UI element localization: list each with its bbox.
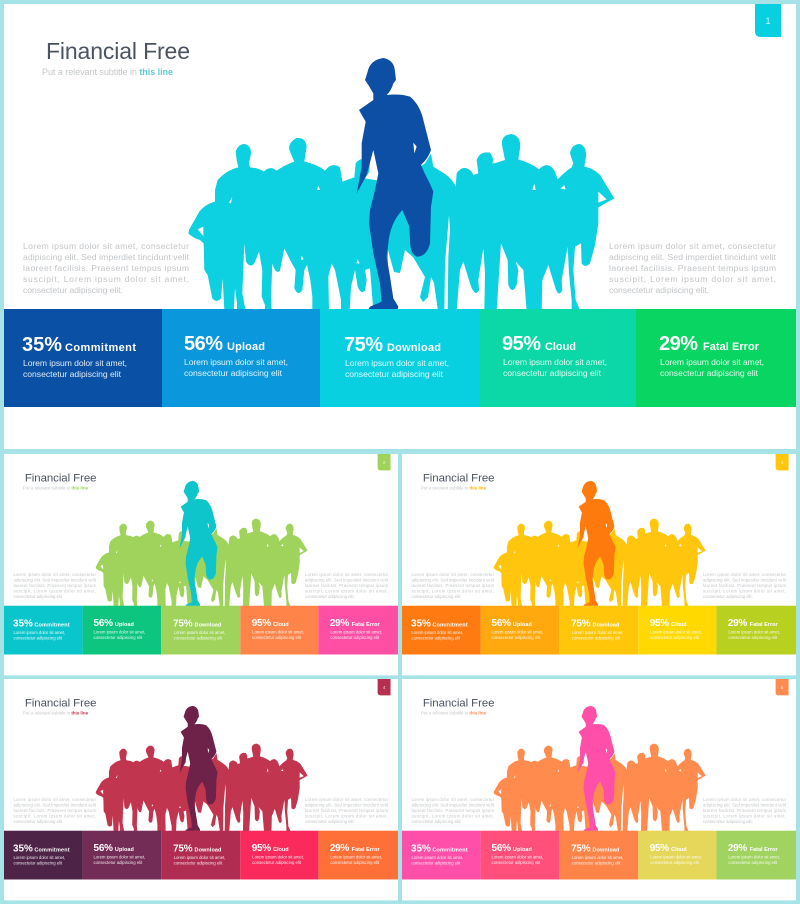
text block right: suscipit, Lorem ipsum dolor sit amet, [305, 813, 388, 818]
stat card: upload: consectetur adipiscing elit [94, 860, 143, 865]
stat card: download [161, 831, 240, 879]
stat card: cloud: 95% [650, 843, 669, 854]
stat card: download: Lorem ipsum dolor sit amet, [174, 630, 225, 635]
stat card: download: Lorem ipsum dolor sit amet, [572, 855, 623, 860]
stat card: fatal error [318, 606, 398, 654]
stat card: commitment [402, 831, 481, 879]
stat card: commitment [4, 606, 83, 654]
stat card: download: consectetur adipiscing elit [572, 861, 621, 866]
stat card: cloud: consectetur adipiscing elit [650, 860, 700, 865]
text block left: consectetur adipiscing elit. [13, 594, 63, 599]
text block left: Lorem ipsum dolor sit amet, consectetur [13, 572, 97, 577]
stat card: fatal error [716, 831, 796, 879]
text block left: suscipit, Lorem ipsum dolor sit amet, [411, 588, 494, 593]
stat card: fatal error: Lorem ipsum dolor sit amet, [660, 357, 764, 367]
text block left: laoreet facilisis. Praesent tempus ipsum [13, 583, 96, 588]
stat card: download [559, 606, 638, 654]
stat card: fatal error: consectetur adipiscing elit [728, 860, 778, 865]
slide background [402, 679, 796, 900]
stat card: fatal error [716, 606, 796, 654]
slide background [4, 4, 796, 449]
subtitle: Put a relevant subtitle in this line [42, 67, 173, 77]
silhouette: lead runner [179, 481, 218, 606]
stat card: cloud: consectetur adipiscing elit [252, 635, 302, 640]
stat card: fatal error: consectetur adipiscing elit [660, 368, 759, 378]
text block left: laoreet facilisis. Praesent tempus ipsum [13, 808, 96, 813]
text block right: Lorem ipsum dolor sit amet, consectetur [703, 572, 787, 577]
stat card: commitment: 35% [22, 334, 62, 356]
page tag: 4 [383, 685, 386, 690]
stat card: upload: Lorem ipsum dolor sit amet, [94, 855, 145, 860]
stat card: commitment: Lorem ipsum dolor sit amet, [13, 630, 65, 635]
stat card: upload [162, 309, 320, 407]
text block left: laoreet facilisis. Praesent tempus ipsum [411, 583, 494, 588]
stat card: upload: 56% [94, 618, 113, 629]
stat card: cloud: Lorem ipsum dolor sit amet, [650, 855, 702, 860]
stat card: upload: consectetur adipiscing elit [492, 860, 541, 865]
text block right: Lorem ipsum dolor sit amet, consectetur [305, 797, 389, 802]
text block left: adipiscing elit. Sed imperdiet tincidunt velit [13, 802, 97, 807]
stat card: commitment: Commitment [34, 623, 70, 629]
stat card: cloud: consectetur adipiscing elit [503, 368, 602, 378]
stat card: fatal error [636, 309, 796, 407]
stat card: download: Lorem ipsum dolor sit amet, [174, 855, 225, 860]
page tag [378, 679, 391, 695]
stat card: cloud [240, 831, 318, 879]
stat card: fatal error: Fatal Error [352, 622, 380, 628]
stat card: download: consectetur adipiscing elit [345, 369, 444, 379]
stat card: download: Lorem ipsum dolor sit amet, [345, 358, 449, 368]
stat card: commitment: Commitment [432, 623, 468, 629]
stat card: commitment: Commitment [65, 342, 136, 354]
text block right: laoreet facilisis. Praesent tempus ipsum [703, 808, 786, 813]
page tag: 1 [765, 16, 771, 26]
panel: small slide crimson [4, 679, 398, 900]
text block right: suscipit, Lorem ipsum dolor sit amet, [305, 588, 388, 593]
stat card: download: Download [593, 623, 619, 629]
stat card: upload: Lorem ipsum dolor sit amet, [184, 357, 288, 367]
stat card: upload: Upload [115, 847, 134, 853]
silhouette: lead runner [577, 481, 616, 606]
text block right: consectetur adipiscing elit. [703, 594, 753, 599]
title: Financial Free [25, 472, 97, 484]
text block left [411, 797, 495, 824]
stat card: fatal error: consectetur adipiscing elit [330, 635, 380, 640]
text block right: Lorem ipsum dolor sit amet, consectetur [703, 797, 787, 802]
text block right: Lorem ipsum dolor sit amet, consectetur [609, 241, 776, 251]
stat card: cloud: Cloud [671, 847, 687, 853]
stat card: cloud: Cloud [545, 341, 576, 353]
text block left: consectetur adipiscing elit. [13, 819, 63, 824]
page tag: 2 [383, 460, 386, 465]
stat card: cloud: Cloud [273, 847, 289, 853]
stat card: cloud [638, 831, 716, 879]
silhouette: running crowd [494, 519, 706, 607]
text block left [411, 572, 495, 599]
stat card: download: consectetur adipiscing elit [572, 636, 621, 641]
stat card: upload [481, 831, 559, 879]
stat card: commitment [4, 831, 83, 879]
slide background [4, 679, 398, 900]
stat card: download: 75% [571, 619, 591, 630]
stat card: commitment: 35% [411, 844, 431, 855]
stat card: cloud: 95% [502, 333, 541, 355]
stat card: cloud [240, 606, 318, 654]
stat card: cloud: consectetur adipiscing elit [252, 860, 302, 865]
stat card: cloud: consectetur adipiscing elit [650, 635, 700, 640]
panel: main slide blue [4, 4, 796, 449]
stat card: download: Download [195, 848, 221, 854]
panel: small slide green [4, 454, 398, 675]
stat card: upload: 56% [492, 843, 511, 854]
stat card: fatal error: Lorem ipsum dolor sit amet, [728, 855, 780, 860]
text block right [609, 241, 777, 295]
slide background [402, 454, 796, 675]
panel: small slide orange pink [402, 679, 796, 900]
stat card: commitment: Commitment [432, 848, 468, 854]
text block right: suscipit, Lorem ipsum dolor sit amet, [703, 588, 786, 593]
stat card: commitment: consectetur adipiscing elit [23, 369, 122, 379]
silhouette: lead runner [179, 706, 218, 831]
subtitle: Put a relevant subtitle in this line [23, 710, 89, 715]
stat card: cloud [479, 309, 636, 407]
stat card: cloud: 95% [252, 618, 271, 629]
stat card: fatal error: Lorem ipsum dolor sit amet, [728, 630, 780, 635]
text block right: consectetur adipiscing elit. [305, 594, 355, 599]
text block left: adipiscing elit. Sed imperdiet tincidunt velit [411, 802, 495, 807]
stat card: download: consectetur adipiscing elit [174, 636, 223, 641]
stat card: upload: Upload [513, 847, 532, 853]
stat card: fatal error: 29% [728, 843, 747, 854]
stat card: upload: 56% [94, 843, 113, 854]
text block left [13, 797, 97, 824]
stat card: commitment: Lorem ipsum dolor sit amet, [13, 855, 65, 860]
stat card: upload: Upload [227, 341, 265, 353]
text block right [305, 797, 389, 824]
stat card: commitment [402, 606, 481, 654]
stat card: fatal error: consectetur adipiscing elit [330, 860, 380, 865]
text block left [13, 572, 97, 599]
text block right: consectetur adipiscing elit. [609, 285, 709, 295]
text block right: Lorem ipsum dolor sit amet, consectetur [305, 572, 389, 577]
text block right: suscipit, Lorem ipsum dolor sit amet, [703, 813, 786, 818]
text block left: consectetur adipiscing elit. [23, 285, 123, 295]
text block left: Lorem ipsum dolor sit amet, consectetur [13, 797, 97, 802]
stat card: cloud: 95% [650, 618, 669, 629]
stat card: fatal error: Fatal Error [352, 847, 380, 853]
stat card: commitment: Commitment [34, 848, 70, 854]
stat card: upload [83, 606, 161, 654]
text block right: adipiscing elit. Sed imperdiet tincidunt velit [305, 577, 389, 582]
stat card: commitment: Lorem ipsum dolor sit amet, [23, 358, 127, 368]
stat card: commitment [4, 309, 162, 407]
text block left: laoreet facilisis. Praesent tempus ipsum [411, 808, 494, 813]
stat card: upload: consectetur adipiscing elit [94, 635, 143, 640]
stat card: upload: 56% [184, 333, 223, 355]
stat card: fatal error: consectetur adipiscing elit [728, 635, 778, 640]
text block left: Lorem ipsum dolor sit amet, consectetur [23, 241, 189, 251]
stat card: cloud: Cloud [671, 622, 687, 628]
text block right: adipiscing elit. Sed imperdiet tincidunt velit [703, 802, 787, 807]
slide background [4, 454, 398, 675]
stat card: fatal error: Lorem ipsum dolor sit amet, [330, 630, 382, 635]
stat card: commitment: 35% [411, 619, 431, 630]
stat card: download [320, 309, 479, 407]
stat card: download: Lorem ipsum dolor sit amet, [572, 630, 623, 635]
page tag: 5 [781, 685, 784, 690]
silhouette: lead runner [357, 58, 433, 309]
text block left: suscipit, Lorem ipsum dolor sit amet, [411, 813, 494, 818]
text block right: adipiscing elit. Sed imperdiet tincidunt velit [609, 252, 777, 262]
text block left: suscipit, Lorem ipsum dolor sit amet, [13, 588, 96, 593]
stat card: fatal error: 29% [659, 333, 698, 355]
silhouette: lead runner [577, 706, 616, 831]
stat card: commitment: Lorem ipsum dolor sit amet, [411, 855, 463, 860]
stat card: cloud: Lorem ipsum dolor sit amet, [252, 630, 304, 635]
text block left: adipiscing elit. Sed imperdiet tincidunt velit [13, 577, 97, 582]
stat card: cloud [638, 606, 716, 654]
stat card: upload [83, 831, 161, 879]
stat card: commitment: 35% [13, 619, 33, 630]
stat card: download: consectetur adipiscing elit [174, 861, 223, 866]
stat card: commitment: 35% [13, 844, 33, 855]
page tag [776, 454, 789, 470]
stat card: cloud: Lorem ipsum dolor sit amet, [252, 855, 304, 860]
stat card: download: 75% [173, 844, 193, 855]
title: Financial Free [423, 472, 495, 484]
text block right: laoreet facilisis. Praesent tempus ipsum [703, 583, 786, 588]
silhouette: running crowd [96, 519, 308, 607]
silhouette: running crowd [188, 134, 614, 311]
stat card: upload: Lorem ipsum dolor sit amet, [492, 855, 543, 860]
text block right: consectetur adipiscing elit. [305, 819, 355, 824]
text block right: suscipit, Lorem ipsum dolor sit amet, [609, 274, 776, 284]
text block left: consectetur adipiscing elit. [411, 819, 461, 824]
stat card: fatal error: Fatal Error [703, 341, 760, 353]
stat card: download: 75% [173, 619, 193, 630]
stat card: cloud: Cloud [273, 622, 289, 628]
stat card: download: Download [593, 848, 619, 854]
stat card: fatal error [318, 831, 398, 879]
stat card: fatal error: Fatal Error [750, 622, 778, 628]
stat card: download [161, 606, 240, 654]
text block right: adipiscing elit. Sed imperdiet tincidunt velit [305, 802, 389, 807]
stat card: cloud: 95% [252, 843, 271, 854]
stat card: commitment: consectetur adipiscing elit [13, 636, 63, 641]
stat card: upload: 56% [492, 618, 511, 629]
text block right: consectetur adipiscing elit. [703, 819, 753, 824]
text block right: laoreet facilisis. Praesent tempus ipsum [305, 808, 388, 813]
page tag [378, 454, 391, 470]
text block right [305, 572, 389, 599]
stat card: upload: Upload [513, 622, 532, 628]
stat card: upload: Lorem ipsum dolor sit amet, [94, 630, 145, 635]
text block left [23, 241, 190, 295]
stat card: commitment: consectetur adipiscing elit [411, 861, 461, 866]
page tag [755, 4, 781, 37]
subtitle: Put a relevant subtitle in this line [23, 485, 89, 490]
stat card: upload: Lorem ipsum dolor sit amet, [492, 630, 543, 635]
stat card: download: Download [195, 623, 221, 629]
page tag: 3 [781, 460, 784, 465]
stat card: commitment: consectetur adipiscing elit [411, 636, 461, 641]
stat card: upload: consectetur adipiscing elit [492, 635, 541, 640]
subtitle: Put a relevant subtitle in this line [421, 485, 487, 490]
stat card: upload: Upload [115, 622, 134, 628]
text block right: laoreet facilisis. Praesent tempus ipsum [305, 583, 388, 588]
title: Financial Free [423, 697, 495, 709]
stat card: cloud: Lorem ipsum dolor sit amet, [650, 630, 702, 635]
text block left: consectetur adipiscing elit. [411, 594, 461, 599]
silhouette: running crowd [96, 744, 308, 832]
text block left: adipiscing elit. Sed imperdiet tincidunt velit [23, 252, 190, 262]
text block right [703, 797, 787, 824]
stat card: fatal error: 29% [728, 618, 747, 629]
text block right [703, 572, 787, 599]
page tag [776, 679, 789, 695]
stat card: commitment: consectetur adipiscing elit [13, 861, 63, 866]
stat card: cloud: Lorem ipsum dolor sit amet, [503, 357, 607, 367]
silhouette: running crowd [494, 744, 706, 832]
title: Financial Free [25, 697, 97, 709]
text block left: suscipit, Lorem ipsum dolor sit amet, [23, 274, 189, 284]
stat card: upload: consectetur adipiscing elit [184, 368, 283, 378]
subtitle: Put a relevant subtitle in this line [421, 710, 487, 715]
stat card: download: 75% [571, 844, 591, 855]
text block left: adipiscing elit. Sed imperdiet tincidunt velit [411, 577, 495, 582]
stat card: fatal error: Lorem ipsum dolor sit amet, [330, 855, 382, 860]
text block right: laoreet facilisis. Praesent tempus ipsum [609, 263, 776, 273]
text block left: laoreet facilisis. Praesent tempus ipsum [23, 263, 189, 273]
stat card: download [559, 831, 638, 879]
stat card: upload [481, 606, 559, 654]
stat card: download: Download [387, 342, 441, 354]
stat card: fatal error: Fatal Error [750, 847, 778, 853]
text block right: adipiscing elit. Sed imperdiet tincidunt velit [703, 577, 787, 582]
stat card: commitment: Lorem ipsum dolor sit amet, [411, 630, 463, 635]
title: Financial Free [46, 38, 190, 64]
text block left: Lorem ipsum dolor sit amet, consectetur [411, 797, 495, 802]
stat card: fatal error: 29% [330, 618, 349, 629]
text block left: suscipit, Lorem ipsum dolor sit amet, [13, 813, 96, 818]
stat card: download: 75% [344, 334, 383, 356]
stat card: fatal error: 29% [330, 843, 349, 854]
text block left: Lorem ipsum dolor sit amet, consectetur [411, 572, 495, 577]
panel: small slide yellow [402, 454, 796, 675]
